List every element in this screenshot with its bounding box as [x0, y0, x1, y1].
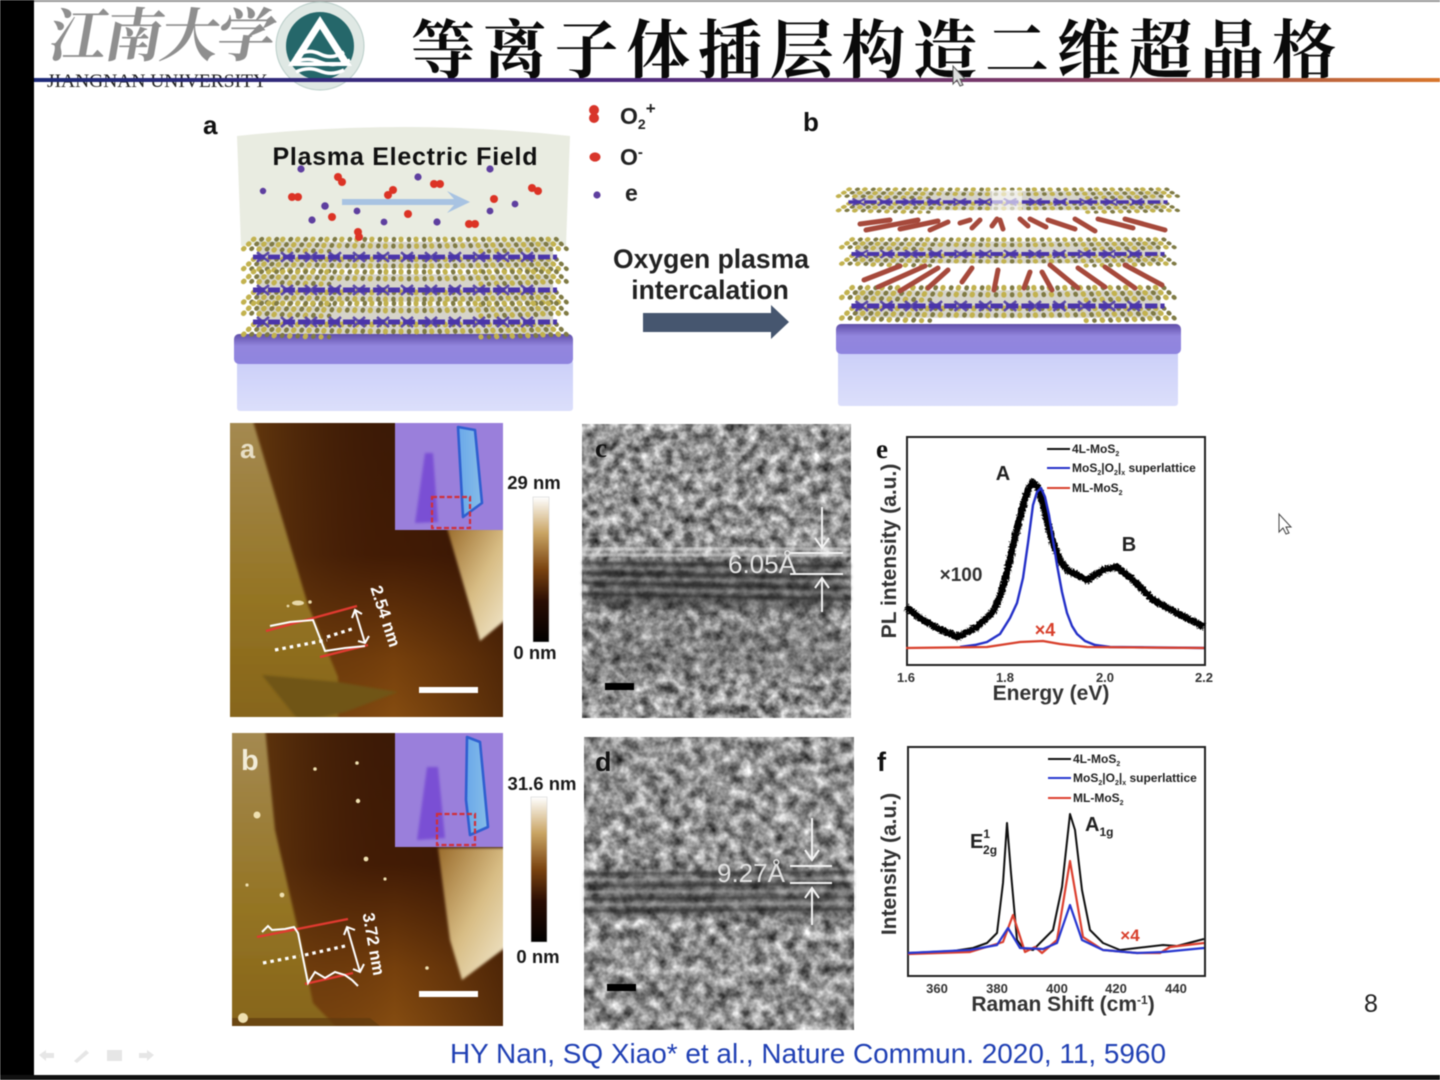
legend: |O — [1101, 461, 1114, 475]
process arrow — [643, 305, 789, 339]
TEM texture — [584, 737, 854, 1030]
step height overlay — [257, 919, 364, 986]
header: university logo and title — [34, 0, 1440, 92]
peak labels: 1g — [1099, 825, 1113, 839]
scale bar — [607, 984, 636, 991]
step height label: 3.72 nm — [359, 911, 388, 977]
x axis title: Energy (eV) — [993, 682, 1109, 705]
spacing value: 6.05Å — [728, 549, 797, 579]
plot frame — [907, 437, 1205, 665]
legend item O2+: + — [646, 99, 656, 118]
terrace, fold and flake — [225, 418, 510, 722]
ML-MoS2 curve — [908, 861, 1204, 954]
annotations: ×4 — [1035, 620, 1055, 640]
AFM background — [232, 733, 503, 1026]
label: c — [595, 433, 607, 463]
legend item O2+: O — [620, 103, 638, 129]
process caption: intercalation — [631, 275, 789, 305]
icon: mouse cursor on title — [953, 66, 965, 86]
page number: 8 — [1364, 990, 1378, 1018]
legend item e: e — [625, 180, 638, 206]
bright flake — [447, 528, 510, 641]
plasma field region — [237, 127, 570, 246]
legend: ML-MoS — [1073, 791, 1120, 805]
superlattice curve — [960, 488, 1204, 648]
logo wordmark: calligraphy: 大 — [156, 4, 225, 69]
axis ticks: 2.0 — [1096, 670, 1114, 685]
legend: x — [1121, 470, 1125, 477]
axis ticks: 420 — [1105, 981, 1127, 996]
legend item O-: O — [620, 144, 638, 170]
icon: mouse cursor right — [1279, 514, 1291, 534]
peak labels: A — [1085, 814, 1099, 836]
spacing annotation — [790, 507, 843, 612]
layered fringes — [584, 872, 854, 916]
legend: 2 — [1119, 490, 1123, 497]
label: d — [595, 747, 612, 777]
terrace and flake — [227, 728, 510, 1031]
process caption: Oxygen plasma — [613, 244, 809, 274]
x axis title: ) — [1148, 993, 1155, 1016]
legend item O2+: 2 — [638, 116, 646, 132]
intercalated oxygen rods — [860, 219, 1165, 291]
title rule — [34, 78, 1440, 82]
scale bar — [419, 991, 478, 997]
x axis title: -1 — [1137, 993, 1148, 1007]
4L-MoS2 curve — [906, 482, 1204, 637]
axis ticks — [926, 981, 1187, 996]
legend: 2 — [1114, 470, 1118, 477]
layered fringes — [582, 549, 851, 675]
legend: |O — [1102, 771, 1115, 785]
legend: superlattice — [1125, 461, 1196, 475]
panel a: plasma over MoS2 stack — [203, 110, 573, 411]
optical inset — [395, 423, 503, 530]
AFM image a — [225, 418, 510, 722]
logo wordmark: calligraphy: 江 — [44, 4, 113, 69]
colour scale b — [508, 773, 576, 967]
panel label: a — [240, 434, 256, 464]
axis ticks: 400 — [1046, 981, 1068, 996]
substrate — [836, 324, 1181, 406]
legend: 2 — [1098, 780, 1102, 787]
TEM image c — [582, 424, 851, 718]
bottom shadow strip — [232, 1018, 380, 1026]
electrons — [260, 165, 518, 226]
legend: 2 — [1116, 761, 1120, 768]
annotations: B — [1122, 534, 1136, 556]
legend: MoS — [1072, 461, 1097, 475]
spacing value: 9.27Å — [717, 858, 786, 888]
annotations: A — [996, 463, 1010, 485]
legend: particle species — [589, 99, 656, 206]
logo wordmark: calligraphy: 学 — [212, 4, 281, 69]
legend — [1047, 442, 1196, 497]
annotations: ×100 — [940, 565, 982, 586]
peak labels — [970, 814, 1140, 945]
chart f: Raman spectra — [877, 747, 1205, 1016]
lighter terrace — [225, 418, 338, 722]
legend: 2 — [1115, 780, 1119, 787]
x axis title: Raman Shift (cm — [971, 993, 1137, 1016]
panel label: b — [241, 745, 259, 777]
peak labels: 1 — [983, 827, 990, 841]
panel label: e — [876, 434, 888, 464]
oxygen ions — [288, 173, 542, 241]
bright flake — [438, 848, 510, 980]
axis ticks — [897, 670, 1213, 685]
plasma title: Plasma Electric Field — [272, 143, 538, 171]
legend item O- — [590, 144, 643, 170]
colour scale b: 31.6 nm — [508, 773, 576, 794]
panel label b: b — [803, 107, 819, 137]
ML-MoS2 curve — [906, 641, 1204, 648]
axis ticks: 440 — [1165, 981, 1187, 996]
legend — [1048, 752, 1197, 807]
legend: | — [1119, 771, 1122, 785]
axis ticks: 2.2 — [1195, 670, 1213, 685]
legend: 4L-MoS — [1073, 752, 1116, 766]
field arrow — [342, 191, 470, 213]
peak labels: 2g — [983, 843, 997, 857]
title: 等离子体插层构造二维超晶格 — [411, 0, 1336, 92]
superlattice curve — [908, 905, 1204, 953]
axis ticks: 1.8 — [996, 670, 1014, 685]
y axis title: Intensity (a.u.) — [878, 793, 901, 935]
scale bar — [419, 687, 478, 693]
AFM image b — [227, 728, 510, 1031]
TEM image d — [584, 737, 854, 1030]
legend: MoS — [1073, 771, 1098, 785]
colour scale b: 0 nm — [516, 946, 560, 967]
lower fold — [263, 674, 394, 717]
MoS2 layered lattice — [241, 239, 569, 337]
MoS2 layers — [836, 189, 1180, 321]
legend: x — [1122, 780, 1126, 787]
panel b: superlattice — [803, 107, 1181, 406]
axis ticks: 1.6 — [897, 670, 915, 685]
axis ticks: 380 — [986, 981, 1008, 996]
substrate — [234, 334, 573, 411]
legend item O2+ — [589, 99, 656, 132]
top grey edge — [34, 0, 1440, 2]
axis ticks: 360 — [926, 981, 948, 996]
colour scale a: 29 nm — [507, 472, 561, 493]
panel label a: a — [203, 110, 218, 140]
chart e: PL spectra — [876, 434, 1213, 705]
icon: slideshow controls — [39, 1050, 154, 1063]
lighter terrace — [232, 732, 332, 1026]
4L-MoS2 curve — [908, 814, 1204, 953]
peak labels: E — [970, 831, 983, 853]
legend: | — [1118, 461, 1121, 475]
legend: superlattice — [1126, 771, 1197, 785]
step height label: 2.54 nm — [366, 583, 404, 649]
citation: HY Nan, SQ Xiao* et al., Nature Commun. 2020, 11, 5960 — [450, 1038, 1166, 1069]
left black video bar — [0, 0, 34, 1080]
legend: 2 — [1115, 451, 1119, 458]
peak labels: ×4 — [1120, 926, 1140, 945]
colour scale a — [507, 472, 561, 663]
legend: ML-MoS — [1072, 481, 1119, 495]
logo wordmark: english: JIANGNAN UNIVERSITY — [47, 71, 267, 92]
legend item O-: - — [638, 144, 643, 161]
panel label: f — [877, 747, 887, 777]
y axis title: PL intensity (a.u.) — [878, 464, 901, 638]
legend: 2 — [1097, 470, 1101, 477]
colour scale a: 0 nm — [513, 642, 557, 663]
scale bar — [605, 683, 634, 690]
bright specks — [238, 761, 429, 1023]
logo wordmark: calligraphy — [44, 4, 281, 69]
TEM texture — [582, 424, 851, 718]
optical inset — [395, 733, 503, 847]
step height overlay — [266, 606, 369, 657]
bottom black bar — [0, 1075, 1440, 1080]
legend: 4L-MoS — [1072, 442, 1115, 456]
logo: university seal — [276, 2, 364, 90]
bright specks — [287, 600, 312, 607]
annotations — [940, 463, 1136, 640]
legend: 2 — [1120, 800, 1124, 807]
AFM background — [230, 423, 503, 717]
spacing annotation — [790, 818, 832, 925]
plot frame — [908, 747, 1205, 976]
logo wordmark: calligraphy: 南 — [100, 4, 169, 69]
